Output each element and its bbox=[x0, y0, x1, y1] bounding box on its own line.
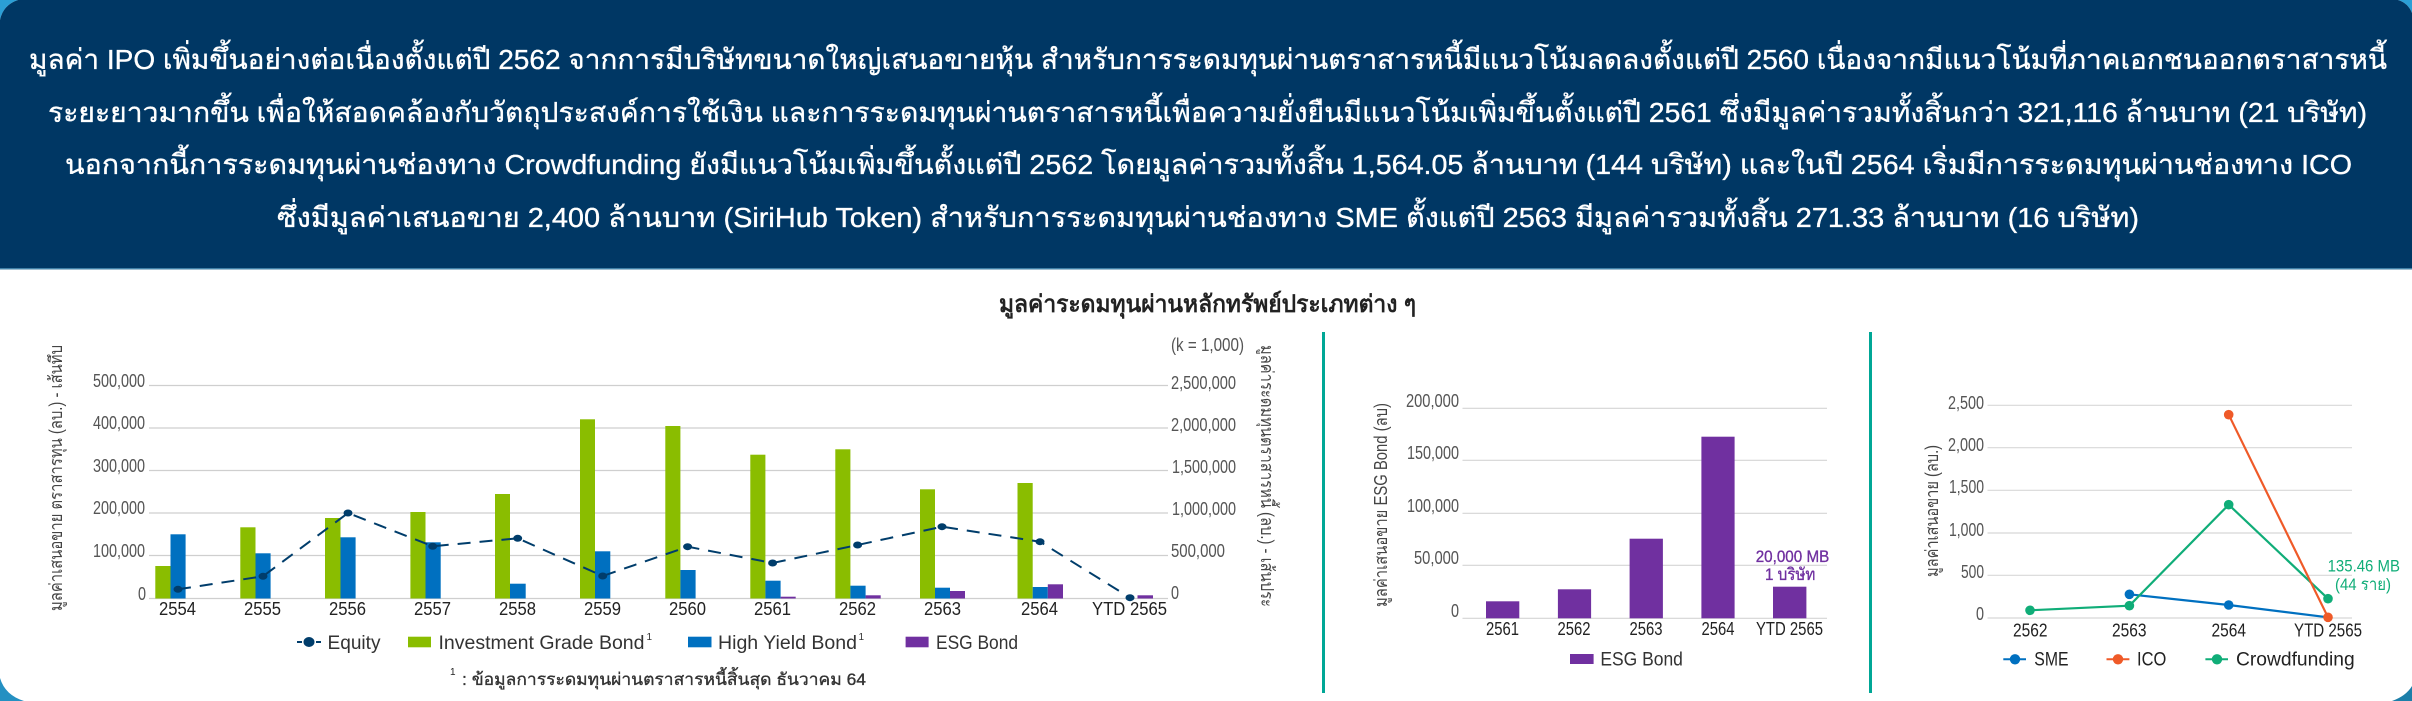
esg y axis labels: 100,000 bbox=[1407, 496, 1459, 516]
esg y axis labels: 50,000 bbox=[1414, 548, 1459, 568]
esg callout: 1 บริษัท bbox=[1765, 565, 1815, 584]
funding x axis labels bbox=[2013, 621, 2362, 641]
funding y axis labels: 2,000 bbox=[1948, 435, 1984, 455]
esg legend bbox=[1570, 650, 1683, 671]
right axis labels: 0 bbox=[1171, 583, 1179, 603]
funding y axis labels: 2,500 bbox=[1948, 393, 1984, 413]
legend: main chart: 1 bbox=[646, 632, 652, 643]
funding legend: ICO bbox=[2137, 650, 2166, 671]
funding x axis labels: 2562 bbox=[2013, 621, 2048, 641]
esg x axis labels: 2561 bbox=[1486, 619, 1519, 639]
esg legend: ESG Bond bbox=[1600, 650, 1683, 671]
corner: bottom left bbox=[0, 678, 24, 701]
divider bbox=[1322, 332, 1325, 693]
right axis labels: 2,500,000 bbox=[1171, 373, 1236, 393]
esg x axis labels bbox=[1486, 619, 1823, 639]
right axis labels: 500,000 bbox=[1171, 541, 1225, 561]
funding callout bbox=[2328, 557, 2400, 594]
line: crowdfunding bbox=[2025, 500, 2333, 615]
esg x axis labels: 2562 bbox=[1558, 619, 1590, 639]
right axis labels: 1,000,000 bbox=[1172, 499, 1236, 519]
line: ico bbox=[2224, 410, 2333, 622]
right axis labels: (k = 1,000) bbox=[1171, 335, 1244, 355]
funding y axis labels: 0 bbox=[1976, 604, 1984, 624]
legend: main chart bbox=[297, 632, 1018, 654]
esg y axis labels: 150,000 bbox=[1407, 443, 1459, 463]
line: sme bbox=[2125, 590, 2328, 617]
funding legend: Crowdfunding bbox=[2236, 650, 2355, 671]
left axis title: มูลค่าเสนอขาย ตราสารทุน (ลบ.) - เส้นทึบ bbox=[46, 345, 67, 611]
left axis labels bbox=[93, 371, 146, 604]
bars: high yield bond bbox=[170, 534, 1048, 598]
funding legend: SME bbox=[2034, 650, 2068, 671]
esg bars bbox=[1486, 437, 1806, 618]
bars: investment grade bond bbox=[155, 419, 1033, 598]
funding axis title: มูลค่าเสนอขาย (ลบ.) bbox=[1922, 445, 1943, 577]
funding callout: (44 ราย) bbox=[2335, 575, 2391, 594]
funding y axis labels bbox=[1948, 393, 1984, 624]
summary text line 1: มูลค่า IPO เพิ่มขึ้นอย่างต่อเนื่องตั้งแต่ปี 2562 จากการมีบริษัทขนาดใหญ่เสนอขายหุ้น สำหรับการระดมทุนผ่านตราสารหนี้มีแนวโน้มลดลงตั้งแต่ปี 2560 เนื่องจากมีแนวโน้มที่ภาคเอกชนออกตราสารหนี้ bbox=[29, 39, 2387, 77]
x axis labels: 2556 bbox=[329, 599, 366, 619]
left axis labels: 200,000 bbox=[93, 498, 145, 518]
esg callout: 20,000 MB bbox=[1756, 547, 1829, 566]
esg x axis labels: YTD 2565 bbox=[1756, 619, 1823, 639]
left axis labels: 0 bbox=[138, 584, 146, 604]
panel: esg bond chart bbox=[1371, 391, 1829, 671]
x axis labels: 2559 bbox=[584, 599, 621, 619]
legend: main chart: ESG Bond bbox=[936, 633, 1018, 654]
legend: main chart: 1 bbox=[858, 632, 864, 643]
panel: summary banner bbox=[0, 0, 2412, 270]
esg x axis labels: 2563 bbox=[1630, 619, 1662, 639]
legend: main chart: High Yield Bond bbox=[718, 633, 857, 654]
funding y axis labels: 1,000 bbox=[1949, 520, 1984, 540]
footnote: : ข้อมูลการระดมทุนผ่านตราสารหนี้สิ้นสุด ธันวาคม 64 bbox=[462, 667, 866, 690]
summary text line 3: นอกจากนี้การระดมทุนผ่านช่องทาง Crowdfunding ยังมีแนวโน้มเพิ่มขึ้นตั้งแต่ปี 2562 โดยมูลค่ารวมทั้งสิ้น 1,564.05 ล้านบาท (144 บริษัท) และในปี 2564 เริ่มมีการระดมทุนผ่านช่องทาง ICO bbox=[65, 144, 2352, 182]
summary text line 4: ซึ่งมีมูลค่าเสนอขาย 2,400 ล้านบาท (SiriHub Token) สำหรับการระดมทุนผ่านช่องทาง SME ตั้งแต่ปี 2563 มีมูลค่ารวมทั้งสิ้น 271.33 ล้านบาท (16 บริษัท) bbox=[277, 197, 2139, 235]
panel: alternative funding line chart bbox=[1922, 393, 2400, 671]
bars: esg bond bbox=[781, 584, 1153, 598]
x axis labels: 2560 bbox=[669, 599, 706, 619]
x axis labels bbox=[159, 599, 1167, 619]
esg y axis labels: 0 bbox=[1451, 601, 1459, 621]
line: equity bbox=[174, 510, 1134, 601]
left axis labels: 400,000 bbox=[93, 413, 145, 433]
legend: main chart: Investment Grade Bond bbox=[438, 633, 644, 654]
right axis labels: 2,000,000 bbox=[1171, 415, 1236, 435]
funding y axis labels: 500 bbox=[1961, 562, 1984, 582]
funding x axis labels: 2564 bbox=[2212, 621, 2246, 641]
funding x axis labels: YTD 2565 bbox=[2294, 621, 2362, 641]
esg callout bbox=[1756, 547, 1829, 584]
corner: top right bbox=[2398, 0, 2412, 13]
x axis labels: 2564 bbox=[1021, 599, 1058, 619]
x axis labels: 2557 bbox=[414, 599, 451, 619]
right axis labels bbox=[1171, 335, 1244, 603]
right axis title: มูลค่าระดมทุนตราสารหนี้ (ลบ.) - เส้นประ bbox=[1256, 345, 1280, 607]
divider bbox=[1869, 332, 1872, 693]
corner: top left bbox=[0, 0, 18, 20]
x axis labels: 2561 bbox=[754, 599, 791, 619]
esg axis title: มูลค่าเสนอขาย ESG Bond (ลบ) bbox=[1371, 403, 1392, 607]
funding legend bbox=[2003, 650, 2355, 671]
x axis labels: 2563 bbox=[924, 599, 961, 619]
summary text line 2: ระยะยาวมากขึ้น เพื่อให้สอดคล้องกับวัตถุประสงค์การใช้เงิน และการระดมทุนผ่านตราสารหนี้เพื่อความยั่งยืนมีแนวโน้มเพิ่มขึ้นตั้งแต่ปี 2561 ซึ่งมีมูลค่ารวมทั้งสิ้นกว่า 321,116 ล้านบาท (21 บริษัท) bbox=[48, 92, 2367, 130]
x axis labels: 2562 bbox=[839, 599, 876, 619]
heading: chart section title: มูลค่าระดมทุนผ่านหลักทรัพย์ประเภทต่าง ๆ bbox=[999, 290, 1416, 320]
x axis labels: 2555 bbox=[244, 599, 281, 619]
panel: main combo chart bbox=[46, 335, 1280, 690]
esg y axis labels bbox=[1406, 391, 1459, 621]
left axis labels: 300,000 bbox=[93, 456, 145, 476]
left axis labels: 500,000 bbox=[93, 371, 145, 391]
esg x axis labels: 2564 bbox=[1702, 619, 1734, 639]
legend: main chart: Equity bbox=[328, 633, 381, 654]
right axis labels: 1,500,000 bbox=[1172, 457, 1236, 477]
left axis labels: 100,000 bbox=[93, 541, 145, 561]
footnote: 1 bbox=[450, 667, 456, 678]
esg y axis labels: 200,000 bbox=[1406, 391, 1459, 411]
x axis labels: 2558 bbox=[499, 599, 536, 619]
funding callout: 135.46 MB bbox=[2328, 557, 2400, 576]
funding x axis labels: 2563 bbox=[2112, 621, 2146, 641]
x axis labels: 2554 bbox=[159, 599, 196, 619]
x axis labels: YTD 2565 bbox=[1092, 599, 1167, 619]
funding y axis labels: 1,500 bbox=[1949, 477, 1984, 497]
corner: bottom right bbox=[2392, 686, 2412, 701]
